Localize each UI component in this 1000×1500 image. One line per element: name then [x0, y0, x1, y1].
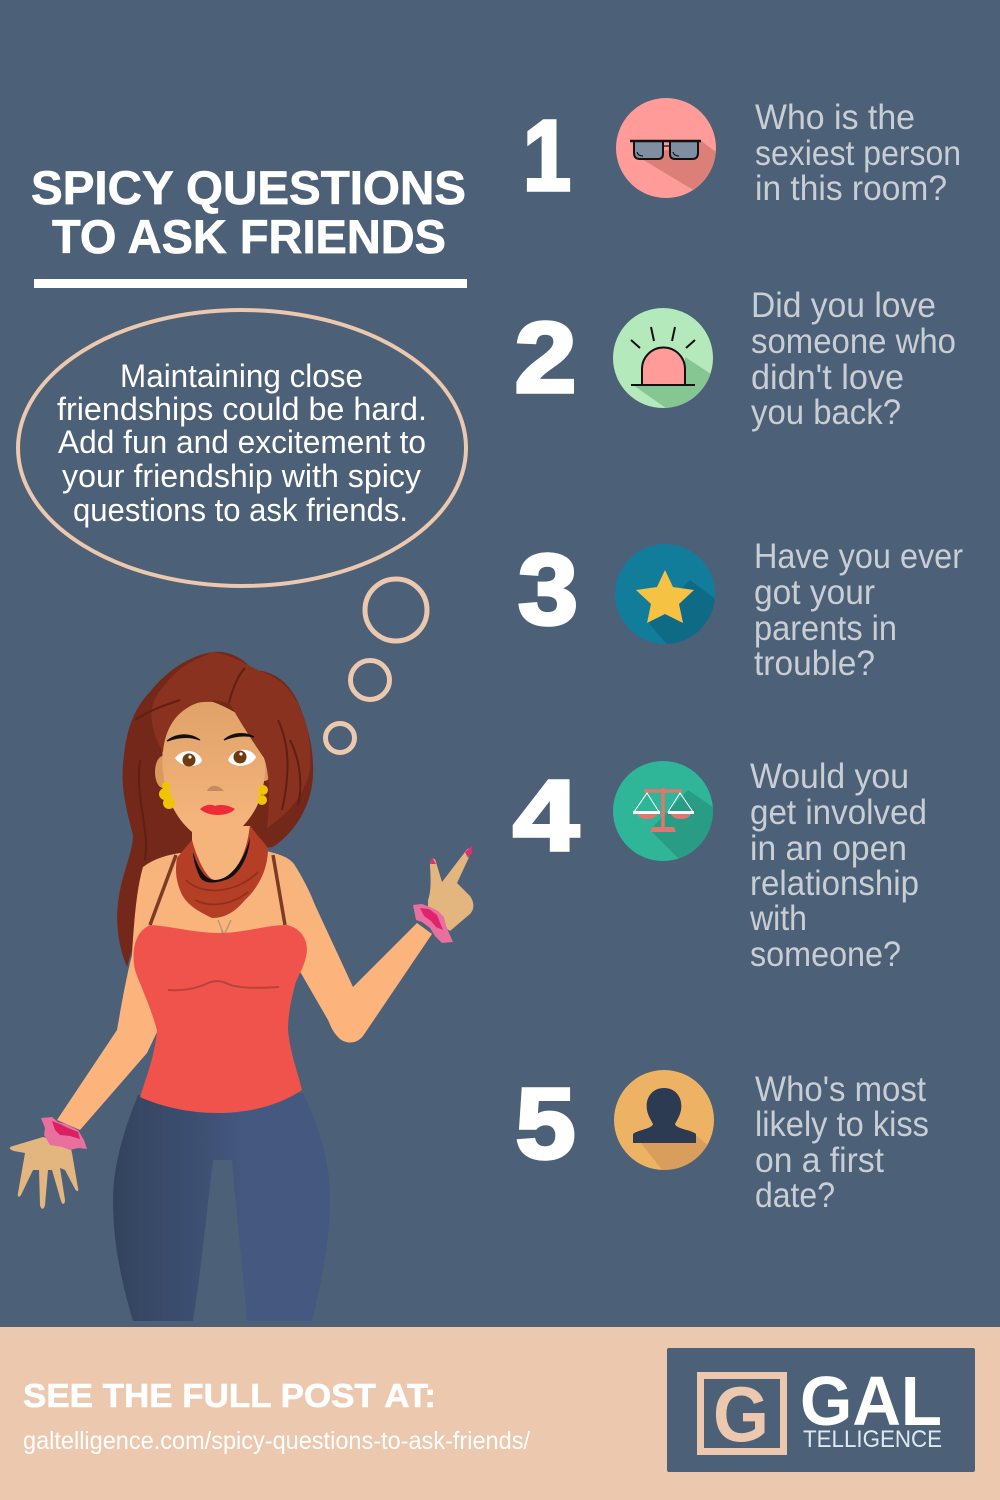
question text 3: trouble? [754, 644, 875, 683]
right hand [428, 848, 473, 931]
question text 5: on a first [755, 1141, 884, 1180]
question text 1: sexiest person [755, 134, 961, 173]
eye right [228, 750, 256, 766]
number 1: 1 [523, 100, 571, 212]
earrings [159, 782, 268, 809]
bubble text: friendships could be hard. [57, 391, 427, 427]
question text 5: Who's most [755, 1070, 926, 1109]
question text 4: get involved [750, 793, 927, 832]
question text 2: you back? [751, 393, 901, 432]
bubble text: your friendship with spicy [62, 458, 421, 494]
hair back [117, 652, 313, 967]
footer url: galtelligence.com/spicy-questions-to-ask-friends/ [23, 1427, 530, 1455]
question 4 [513, 757, 927, 974]
question text 4: relationship [750, 864, 919, 903]
question 3 [518, 544, 962, 676]
face [162, 702, 265, 841]
question text 1 [755, 98, 961, 208]
neck [192, 826, 250, 883]
question text 4: someone? [750, 935, 901, 974]
red top [134, 925, 307, 1113]
thought bubble [18, 310, 466, 752]
bubble text [57, 358, 427, 528]
title: TO ASK FRIENDS [52, 210, 446, 263]
left arm [57, 867, 190, 1130]
chest and right arm [140, 850, 432, 1043]
eye left [175, 751, 202, 766]
number 2: 2 [514, 302, 576, 414]
icon: star [615, 544, 715, 644]
question text 1: in this room? [755, 169, 947, 208]
bubble text: questions to ask friends. [73, 492, 408, 528]
icon: scales [613, 761, 713, 861]
bubble trail circles [326, 579, 427, 752]
question text 2: didn't love [751, 358, 904, 397]
left hand [10, 1137, 78, 1209]
scarf [176, 825, 268, 918]
bubble text: Maintaining close [120, 358, 363, 394]
bubble oval [18, 310, 466, 586]
woman illustration [10, 652, 473, 1321]
question text 4: in an open [750, 829, 907, 868]
straps [150, 855, 285, 925]
right scrunchie [413, 904, 453, 943]
necklace [218, 920, 231, 943]
number 3: 3 [518, 534, 578, 646]
title: SPICY QUESTIONS [31, 161, 466, 214]
number 5: 5 [516, 1068, 576, 1180]
logo G: G [713, 1370, 769, 1458]
eyebrows [167, 734, 254, 741]
waist crease [168, 981, 279, 990]
question 5 [516, 1068, 929, 1215]
footer band [0, 1327, 1000, 1500]
question text 2 [751, 286, 956, 432]
question text 4: Would you [750, 757, 909, 796]
question 1 [526, 98, 959, 200]
question text 4: with [749, 899, 807, 938]
icon: person [614, 1070, 714, 1170]
question text 3: parents in [754, 609, 897, 648]
icon: alarm light [613, 308, 713, 408]
number 4: 4 [513, 760, 579, 872]
question text 4 [749, 757, 927, 974]
left scrunchie [41, 1117, 87, 1150]
question text 2: Did you love [751, 286, 936, 325]
question text 1: Who is the [755, 98, 915, 137]
scarf folds [186, 872, 258, 904]
logo [667, 1348, 975, 1472]
question text 5 [755, 1070, 929, 1215]
scarf shadow [193, 838, 250, 883]
question text 5: likely to kiss [755, 1105, 929, 1144]
question text 3: got your [754, 573, 875, 612]
logo wordmark: GAL [800, 1362, 942, 1440]
question 2 [514, 286, 956, 432]
title underline [34, 279, 467, 288]
hair strands [135, 668, 300, 860]
ear left [155, 756, 171, 788]
ear right [258, 749, 272, 781]
jeans [113, 1093, 330, 1321]
fingernails [430, 846, 472, 864]
question text 3 [754, 537, 963, 683]
question text 2: someone who [751, 322, 956, 361]
logo square [700, 1376, 784, 1452]
logo sub wordmark: TELLIGENCE [803, 1426, 942, 1453]
nose [207, 786, 224, 791]
front hair [151, 652, 310, 828]
question text 5: date? [755, 1176, 835, 1215]
bubble text: Add fun and excitement to [58, 424, 426, 460]
question text 3: Have you ever [754, 537, 963, 576]
lips [200, 805, 235, 815]
footer heading: SEE THE FULL POST AT: [23, 1377, 436, 1414]
title [31, 161, 466, 263]
icon: glasses [616, 98, 716, 198]
